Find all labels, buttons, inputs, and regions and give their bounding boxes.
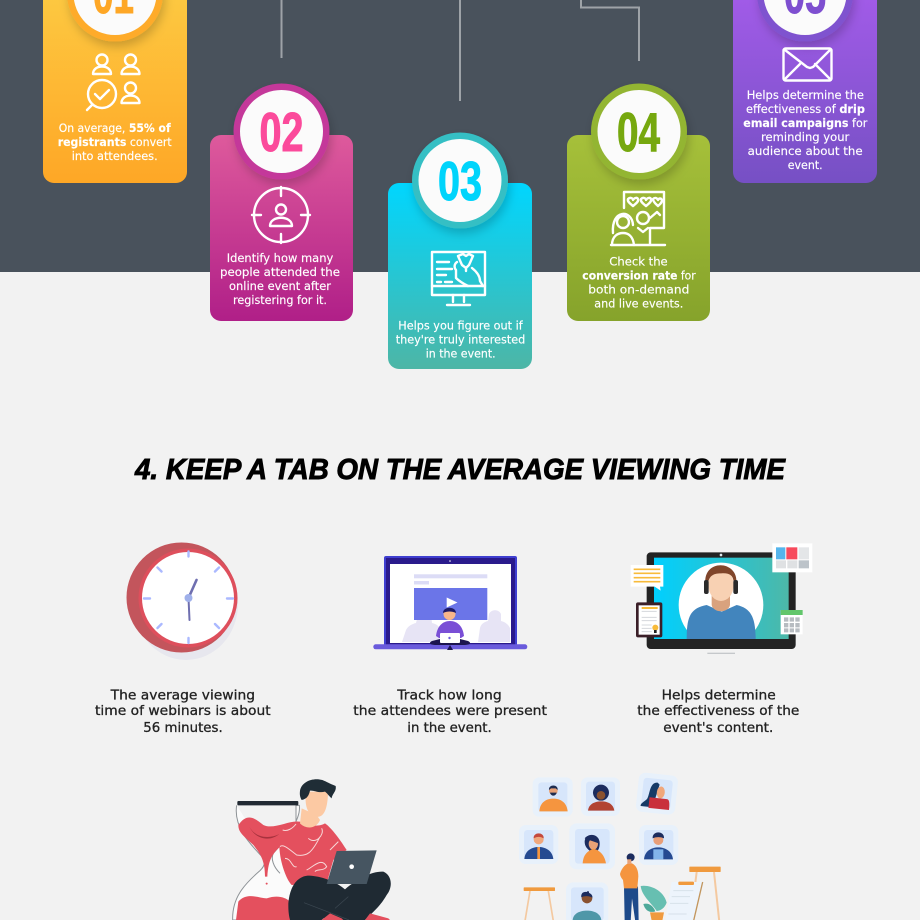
text: track attendance	[353, 688, 547, 736]
panel: card 04: 04	[617, 101, 660, 163]
text: card 02: people attended the	[220, 265, 340, 279]
standing person	[620, 853, 639, 920]
text: card 03: Helps you figure out if	[398, 318, 524, 332]
text: card 04	[582, 255, 696, 311]
text: card 03	[396, 318, 525, 360]
easel right	[689, 867, 721, 920]
text: card 03: they're truly interested	[396, 332, 525, 346]
icon: monitor	[432, 252, 485, 305]
plant	[641, 886, 667, 920]
text: card 03: in the event.	[426, 346, 496, 360]
profile 2	[581, 777, 620, 816]
illustration: clock	[126, 542, 238, 660]
icon: target person	[252, 187, 310, 243]
text: card 05	[743, 88, 868, 172]
icon: conversion	[611, 192, 665, 245]
text: card 05: audience about the	[748, 144, 863, 158]
figure: attendee	[430, 608, 470, 650]
text: card 02: registering for it.	[233, 293, 327, 307]
illustration: laptop with attendee	[373, 556, 527, 650]
profile 6	[639, 825, 678, 865]
profile 4	[519, 825, 558, 864]
panel: card 04	[567, 84, 710, 321]
panel: card 02: 02	[260, 101, 304, 163]
widget: dashboard	[772, 543, 812, 572]
widget: certificate	[636, 602, 662, 637]
text: card 05: reminding your	[761, 130, 850, 144]
text: card 01: into attendees.	[72, 149, 158, 163]
text: card 05: Helps determine the	[747, 88, 864, 102]
text: viewing time: 56 minutes.	[143, 720, 223, 736]
flip board	[665, 882, 703, 920]
panel: card 01	[43, 0, 187, 183]
panel: card 03	[388, 132, 532, 369]
icon: envelope	[784, 48, 832, 80]
panel: card 03: 03	[438, 150, 482, 212]
text: card 01: On average, 55% of	[59, 121, 172, 135]
text: card 04: and live events.	[594, 297, 683, 311]
text: card 04: conversion rate for	[582, 269, 696, 283]
profile 1	[533, 777, 573, 817]
text: card 04: Check the	[609, 255, 668, 269]
hourglass	[233, 801, 300, 920]
panel: card 02	[210, 84, 353, 321]
text: card 02: Identify how many	[227, 251, 333, 265]
profile 5	[569, 823, 615, 869]
text: card 04: both on-demand	[588, 283, 689, 297]
text: content effectiveness: Helps determine	[662, 688, 776, 704]
easel left	[524, 887, 555, 920]
profile 3	[635, 772, 679, 815]
text: card 02: online event after	[229, 279, 331, 293]
text: track attendance: Track how long	[396, 688, 502, 704]
text: card 02	[220, 251, 340, 307]
widget: chat bubble	[631, 565, 663, 591]
text: viewing time: The average viewing	[110, 688, 255, 704]
text: track attendance: in the event.	[407, 720, 492, 736]
widget: calendar	[781, 610, 803, 634]
text: card 01	[58, 121, 172, 163]
illustration: man with hourglass	[233, 779, 391, 920]
panel: card 05	[733, 0, 877, 183]
man	[279, 779, 391, 920]
text: content effectiveness: the effectiveness of the	[637, 703, 799, 719]
text: card 01: registrants convert	[58, 135, 172, 149]
figure: presenter	[679, 563, 763, 647]
text: card 05: email campaigns for	[743, 116, 868, 130]
text: card 05: event.	[788, 158, 823, 172]
profile 7	[566, 882, 608, 920]
text: track attendance: the attendees were present	[353, 703, 547, 719]
text: viewing time	[95, 688, 271, 736]
text: viewing time: time of webinars is about	[95, 703, 271, 719]
text: content effectiveness	[637, 688, 799, 736]
connector lines	[282, 0, 639, 101]
icon: registrants	[87, 54, 140, 110]
heading: 4. KEEP A TAB ON THE AVERAGE VIEWING TIME	[134, 454, 787, 486]
illustration: attendee profiles	[519, 772, 721, 920]
text: card 05: effectiveness of drip	[746, 102, 865, 116]
illustration: tablet video call	[631, 543, 812, 654]
text: content effectiveness: event's content.	[663, 720, 773, 736]
